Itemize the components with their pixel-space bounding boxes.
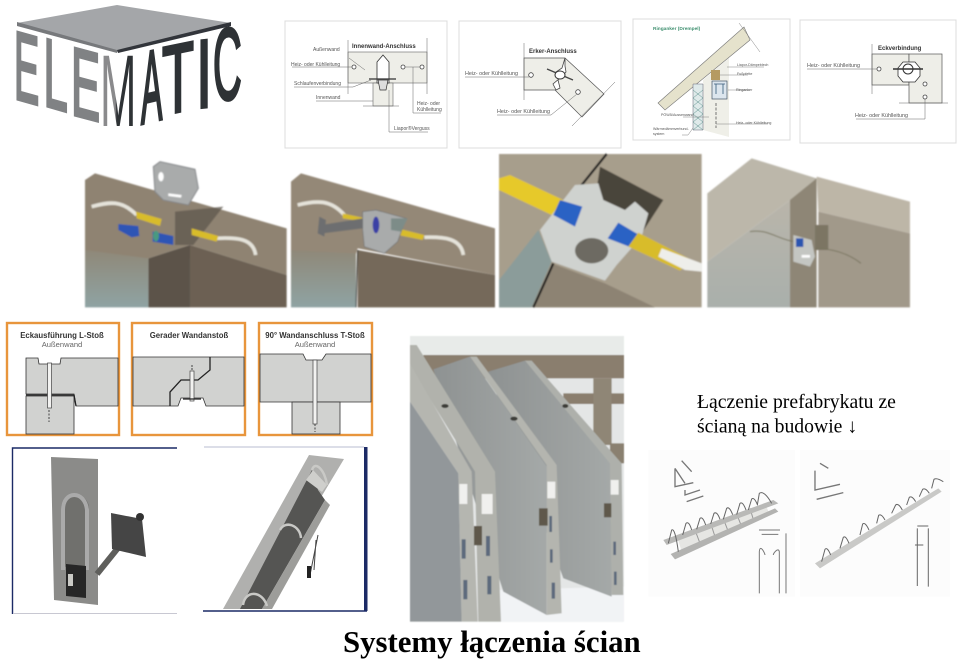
diagram: Innenwand-Anschluss: Liapor®Verguss	[394, 125, 430, 132]
photo: connector close-up	[499, 154, 702, 307]
caption: precast to wall connection: ścianą na budowie ↓	[697, 416, 857, 438]
diagram: Ringanker (Drempel)	[633, 19, 790, 140]
diagram: Ringanker (Drempel): Wärmedämmverbund-	[653, 127, 690, 131]
diagram: Innenwand-Anschluss: Heiz- oder Kühlleitung	[291, 62, 340, 68]
diagram: Innenwand-Anschluss	[285, 21, 447, 148]
diagram: Innenwand-Anschluss: Schlaufenverbindung	[294, 81, 341, 87]
diagram: Ringanker (Drempel): Heiz- oder Kühlleitung	[736, 121, 771, 125]
logo: Elematic: T	[162, 21, 194, 136]
diagram panel: 90° Wandanschluss T-Stoß	[259, 323, 372, 435]
diagram panel: Eckausführung L-Stoß: Außenwand	[42, 340, 82, 349]
caption: precast to wall connection: Łączenie prefabrykatu ze	[697, 391, 896, 413]
diagram: Ringanker (Drempel): Liapor-Dämpeblech	[737, 63, 768, 67]
photo: connector before assembly	[85, 162, 287, 307]
diagram: Ringanker (Drempel): Ringanker (Drempel)	[653, 26, 701, 32]
logo: Elematic: I	[196, 18, 212, 129]
diagram: anchor rail with loops	[800, 450, 950, 597]
diagram: Ringanker (Drempel): PÖWÄ/Aussenwand	[661, 113, 694, 117]
diagram: Eckverbindung	[800, 20, 956, 143]
diagram: Innenwand-Anschluss: Außenwand	[313, 47, 340, 53]
diagram: Ringanker (Drempel): Ringanker	[736, 88, 753, 92]
logo: Elematic: M	[100, 34, 136, 148]
logo: Elematic: E	[14, 10, 39, 126]
diagram: Eckverbindung: Heiz- oder Kühlleitung	[807, 63, 860, 69]
photo: precast concrete wall panels	[410, 336, 624, 622]
logo: Elematic: E	[71, 28, 100, 144]
diagram: Erker-Anschluss: Heiz- oder Kühlleitung	[465, 71, 518, 77]
diagram: reinforcement basket rail	[648, 450, 795, 597]
diagram: Erker-Anschluss	[459, 21, 621, 148]
diagram: Ringanker (Drempel): system	[653, 132, 664, 136]
diagram panel: 90° Wandanschluss T-Stoß: Außenwand	[295, 340, 335, 349]
diagram panel: Gerader Wandanstoß: Gerader Wandanstoß	[150, 331, 229, 340]
photo: connector assembled	[291, 173, 495, 307]
caption: precast to wall connection	[697, 391, 896, 438]
diagram: Ringanker (Drempel): Fußpfette	[737, 72, 752, 76]
diagram: Erker-Anschluss: Heiz- oder Kühlleitung	[497, 109, 550, 115]
diagram: Erker-Anschluss: Erker-Anschluss	[529, 49, 577, 55]
logo: Elematic: C	[213, 8, 242, 122]
diagram panel: 90° Wandanschluss T-Stoß: 90° Wandanschluss T-Stoß	[265, 331, 365, 340]
diagram: Eckverbindung: Heiz- oder Kühlleitung	[855, 113, 908, 119]
diagram panel: Eckausführung L-Stoß: Eckausführung L-Stoß	[20, 331, 104, 340]
diagram: Innenwand-Anschluss: Innenwand-Anschluss	[352, 44, 416, 50]
diagram: Innenwand-Anschluss: Innenwand	[316, 95, 341, 101]
photo: connector installed in corner	[707, 158, 910, 307]
title: Systemy łączenia ścian	[343, 625, 641, 659]
logo: Elematic: A	[141, 27, 163, 147]
diagram: Innenwand-Anschluss: Heiz- oder	[417, 101, 440, 107]
logo: Elematic: L	[44, 18, 68, 134]
logo: Elematic	[14, 5, 242, 148]
photo: anchor rail diagonal	[203, 447, 368, 611]
diagram panel: Eckausführung L-Stoß	[7, 323, 119, 435]
diagram panel: Gerader Wandanstoß	[132, 323, 245, 435]
diagram: Innenwand-Anschluss: Kühlleitung	[417, 107, 442, 113]
diagram: Eckverbindung: Eckverbindung	[878, 46, 922, 52]
photo: wall anchor channel	[12, 448, 177, 614]
